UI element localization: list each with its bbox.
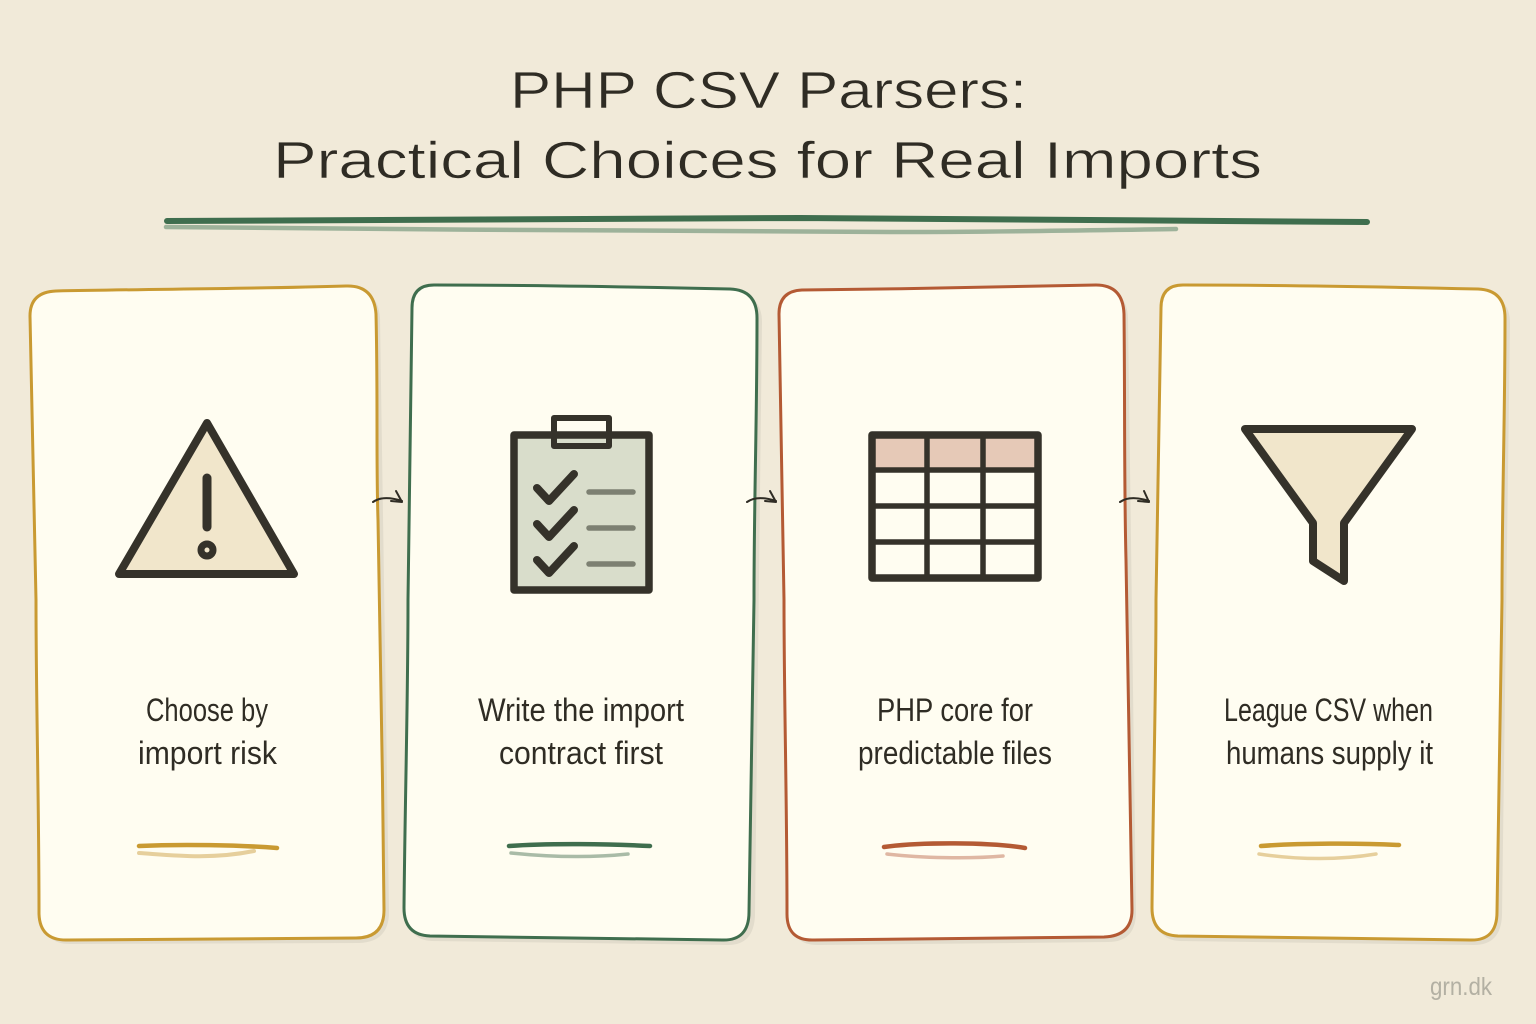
arrow 3 [1120,491,1149,502]
panel: write the import contract [404,285,762,945]
panel: PHP core [779,285,1136,945]
arrow 2 [747,491,776,502]
icon: funnel [1245,429,1412,581]
label: PHP core for [877,692,1033,728]
label: contract first [499,735,663,771]
watermark: grn.dk [1430,973,1492,1001]
accent underline [139,845,277,856]
title underline [166,218,1367,232]
title [273,62,1262,190]
label: import risk [138,735,278,771]
title: PHP CSV Parsers: [510,62,1027,120]
accent underline [1259,844,1399,858]
label: League CSV when [1224,692,1433,728]
title: Practical Choices for Real Imports [273,132,1262,190]
label [478,692,684,771]
icon: warning triangle [119,423,294,574]
label [858,692,1052,771]
label [138,692,278,771]
accent underline [509,844,650,857]
arrow 1 [373,491,402,502]
icon: clipboard checklist [514,418,649,590]
label: humans supply it [1226,735,1433,771]
panel: choose by import risk [30,286,389,944]
label: Write the import [478,692,684,728]
panel: League CSV [1152,285,1510,945]
label: Choose by [146,692,268,728]
accent underline [884,843,1025,858]
label: predictable files [858,735,1052,771]
icon: table grid [872,435,1038,578]
label [1224,692,1433,771]
